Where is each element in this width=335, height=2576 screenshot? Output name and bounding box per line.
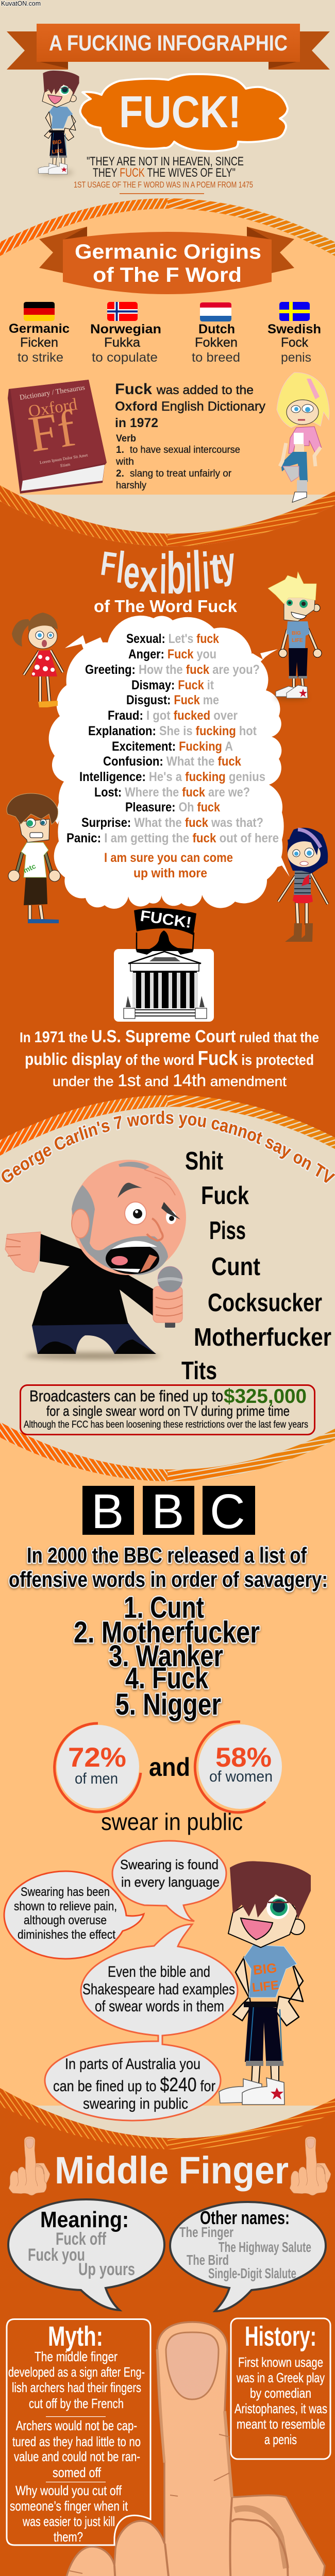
character: spiky blond boy: BIG (292, 631, 301, 636)
bubble: other names: The Bird (187, 2252, 229, 2268)
thought cloud with usage list: Explanation: She is fucking hot (88, 724, 257, 738)
panel: BBC (0, 1437, 335, 2121)
bubble: bible and Shakespeare: Even the bible and (108, 1963, 210, 1980)
ranked list: 3. Wanker (109, 1639, 223, 1673)
quote: 1ST USAGE OF THE F WORD WAS IN A POEM FROM 1475 (74, 180, 253, 190)
quote: "THEY ARE NOT IN HEAVEN, SINCE (87, 155, 244, 168)
Germanic label: to strike (18, 350, 63, 365)
title ribbon (7, 24, 330, 70)
stat: 72% of men: 72% (68, 1742, 126, 1773)
ranked list: 2. Motherfucker (74, 1616, 260, 1649)
ranked list: 4. Fuck (125, 1662, 209, 1695)
box: myth: Archers would not be cap- (16, 2418, 137, 2433)
Supreme Court text (20, 1027, 319, 1090)
heading: Flexibility: y (216, 537, 239, 587)
bubble: meaning: Up yours (78, 2260, 135, 2279)
panel: George Carlin (0, 1095, 335, 1482)
bubble: bible and Shakespeare (45, 1924, 238, 2121)
bubble: relieves pain: Swearing has been (21, 1885, 110, 1899)
list of seven words: Fuck (201, 1182, 249, 1210)
icon: Oxford dictionary: Ff (25, 399, 79, 463)
box: myth: value and could not be ran- (14, 2449, 140, 2464)
dictionary text: to have sexual intercourse (130, 445, 240, 455)
Germanic label (9, 321, 70, 365)
thought cloud with usage list: Intelligence: He's a fucking genius (79, 770, 265, 784)
thought cloud with usage list: Surprise: What the fuck was that? (81, 816, 263, 830)
heading: Flexibility: i (185, 542, 193, 604)
bubble: other names: Other names: (200, 2207, 290, 2228)
character: boy swearing (38, 71, 79, 176)
dictionary text (115, 381, 265, 491)
character: spiky blond boy: LIFE (292, 638, 303, 643)
court card (114, 907, 214, 1022)
BBC logo: C (210, 1484, 245, 1539)
Germanic label: Germanic (9, 321, 70, 336)
callout: broadcaster fines (21, 1385, 314, 1434)
box: history: by comedian (250, 2385, 311, 2401)
bubble: meaning: Fuck off (56, 2229, 106, 2249)
bubble text: Australia fine: swearing in public (83, 2095, 188, 2112)
box: myth: tured as they had little to no (12, 2434, 141, 2449)
dictionary text: 1. (116, 445, 124, 455)
dictionary text: harshly (116, 480, 146, 491)
Norwegian label: to copulate (92, 350, 158, 365)
box: myth: developed as a sign after Eng- (8, 2364, 145, 2380)
stat: 58% of women: of women (209, 1768, 273, 1785)
stat: 72% of men: of men (75, 1770, 118, 1787)
Swedish label (267, 322, 321, 365)
illustration: giant middle finger (56, 2322, 325, 2576)
Dutch label (192, 322, 240, 365)
bubble: relieves pain: although overuse (24, 1913, 107, 1927)
Dutch label: to breed (192, 350, 240, 365)
thought cloud with usage list: up with more (133, 866, 207, 880)
dictionary text: with (115, 456, 134, 467)
flag: Netherlands (200, 302, 231, 321)
flag: Norway (107, 302, 138, 321)
Swedish label: penis (281, 350, 311, 365)
list of seven words (181, 1147, 331, 1385)
thought cloud with usage list: Greeting: How the fuck are you? (85, 663, 260, 677)
Norwegian label: Fukka (104, 335, 140, 350)
character: boy swearing: LIFE (52, 148, 63, 155)
BBC logo (82, 1484, 255, 1539)
Supreme Court text: under the 1st and 14th amendment (53, 1071, 287, 1090)
bubble: every language (112, 1841, 226, 1921)
icon: Oxford dictionary (8, 380, 107, 494)
curved heading: George Carlin's 7 words you cannot say on TV (1, 1109, 335, 1184)
speech cloud: FUCK!: FUCK! (119, 87, 241, 137)
heading: Flexibility: t (208, 544, 224, 593)
list of seven words: Tits (181, 1357, 217, 1385)
BBC headline (9, 1543, 328, 1591)
court building (124, 952, 207, 1019)
panel: middle finger (0, 2056, 335, 2576)
list of seven words: Cunt (211, 1253, 260, 1281)
dictionary text: 2. (116, 468, 124, 479)
character: George Carlin (5, 1160, 186, 1360)
box: myth (7, 2319, 150, 2545)
character: smiling boy: BIG (252, 1960, 278, 1978)
thought cloud with usage list: Excitement: Fucking A (112, 739, 233, 754)
quote: THEY FUCK THE WIVES OF ELY" (93, 166, 236, 180)
protest banner: FUCK! (139, 907, 193, 931)
character: boy swearing: BIG (52, 139, 62, 146)
bubble: meaning: Meaning: (40, 2207, 129, 2232)
heading: Flexibility: b (166, 541, 186, 606)
bubble text: Australia fine (53, 2056, 215, 2112)
thought cloud with usage list: I am sure you can come (104, 851, 233, 865)
thought cloud with usage list (49, 616, 290, 909)
character: dark-haired girl (278, 828, 328, 942)
bubble: relieves pain: shown to relieve pain, (14, 1900, 117, 1913)
icon: Oxford dictionary: Lorem Ipsum Dolor Sit Amet (39, 453, 89, 465)
ranked list: 1. Cunt (124, 1591, 204, 1624)
thought cloud with usage list: Lost: Where the fuck are we? (94, 785, 250, 800)
box: myth: them? (54, 2529, 83, 2545)
heading: Flexibility: F (98, 545, 119, 584)
connector word: and: and (149, 1753, 190, 1782)
ranked list (74, 1591, 260, 1721)
heading ribbon: Germanic Origins (75, 241, 261, 263)
thought cloud with usage list: Anger: Fuck you (128, 647, 216, 662)
icon: small hand right (290, 2137, 331, 2195)
list of seven words: Shit (185, 1147, 223, 1175)
BBC logo: B (91, 1484, 124, 1539)
dictionary text: in 1972 (115, 416, 158, 430)
dictionary text: Verb (116, 433, 136, 444)
heading: Middle Finger: Middle Finger (55, 2149, 289, 2192)
thought cloud with usage list: Disgust: Fuck me (126, 693, 219, 707)
flag: Germany (24, 302, 55, 321)
Swedish label: Fock (281, 335, 308, 350)
Dutch label: Fokken (195, 335, 238, 350)
BBC logo: B (152, 1484, 184, 1539)
bubble text: Australia fine: can be fined up to $240 for (53, 2074, 215, 2096)
thought cloud with usage list: Pleasure: Oh fuck (125, 800, 220, 815)
panel: flexibility (0, 485, 335, 1156)
bubble: relieves pain: diminishes the effect (18, 1928, 115, 1942)
dictionary text: Oxford English Dictionary (115, 399, 265, 414)
character: brown-haired boy: mtc (22, 862, 37, 875)
heading: Flexibility: i (159, 544, 167, 605)
ranked list: 5. Nigger (115, 1688, 221, 1721)
bubble: other names (170, 2202, 326, 2311)
box: history: a penis (264, 2432, 297, 2447)
panel: Germanic origins (0, 198, 335, 502)
subheading: of The Word Fuck (94, 597, 238, 616)
callout: broadcaster fines: for a single swear word on TV during prime time (46, 1403, 290, 1419)
icon: Oxford dictionary: Dictionary / Thesaurus (19, 384, 86, 402)
callout: broadcaster fines: Broadcasters can be fined up to (29, 1387, 223, 1405)
protest banner (134, 907, 196, 955)
character: spiky blond boy (268, 572, 322, 700)
speech cloud: FUCK! (80, 74, 288, 151)
bubble: relieves pain (4, 1871, 144, 1959)
bubble: every language: in every language (121, 1874, 220, 1890)
character: girl in red dress (12, 613, 63, 707)
list of seven words: Piss (209, 1217, 246, 1245)
Norwegian label: Norwegian (90, 322, 161, 336)
Dutch label: Dutch (198, 322, 235, 336)
heading ribbon: of The F Word (93, 264, 242, 286)
bubble: meaning: Fuck you (28, 2245, 85, 2265)
icon: small hand left (9, 2137, 50, 2195)
box: myth: was easier to just kill (22, 2514, 115, 2529)
box: myth: lish archers had their fingers (12, 2380, 141, 2395)
bubble text: Australia fine: In parts of Australia you (65, 2056, 200, 2073)
callout: broadcaster fines: $325,000 (224, 1385, 307, 1408)
icon: Oxford dictionary: Etiam (60, 462, 71, 468)
stat: 58% of women: 58% (215, 1742, 272, 1773)
heading: Flexibility: i (200, 542, 211, 600)
thought cloud with usage list: Confusion: What the fuck (103, 754, 241, 769)
character: blonde girl (277, 372, 329, 502)
bubble: bible and Shakespeare: of swear words in them (95, 1998, 224, 2015)
heading ribbon (39, 227, 294, 294)
Swedish label: Swedish (267, 322, 321, 336)
box: myth: Myth: (48, 2321, 103, 2352)
stat: 58% of women (195, 1722, 282, 1812)
bubble: every language: Swearing is found (120, 1857, 219, 1872)
character: smiling boy: LIFE (252, 1978, 279, 1995)
box: myth: somed off (53, 2465, 102, 2480)
quote (74, 155, 253, 190)
Supreme Court text: public display of the word Fuck is protected (25, 1047, 314, 1070)
panel: intro (7, 24, 330, 194)
flag: Sweden (279, 302, 310, 321)
bubble: bible and Shakespeare: Shakespeare had examples (82, 1981, 235, 1998)
box: history (231, 2318, 330, 2459)
box: myth: someone’s finger when it (10, 2498, 128, 2514)
Norwegian label (90, 322, 161, 365)
Supreme Court text: In 1971 the U.S. Supreme Court ruled that the (20, 1027, 319, 1046)
caption: swear in public (101, 1808, 243, 1835)
dictionary text: slang to treat unfairly or (130, 468, 232, 479)
character: smiling boy (219, 1861, 311, 2105)
box: myth: The middle finger (35, 2349, 118, 2364)
title: A FUCKING INFOGRAPHIC (49, 31, 288, 56)
bubble: meaning (8, 2199, 164, 2310)
thought cloud with usage list: Sexual: Let's fuck (126, 632, 219, 646)
dictionary text: Fuck was added to the (115, 381, 254, 398)
heading: Flexibility: l (191, 539, 202, 604)
heading: Flexibility: l (114, 543, 127, 592)
box: myth: Why would you cut off (15, 2483, 122, 2498)
Germanic label: Ficken (20, 335, 58, 350)
character: brown-haired boy (7, 793, 60, 923)
bubble: other names: The Finger (179, 2224, 233, 2240)
thought cloud with usage list: Fraud: I got fucked over (108, 708, 238, 723)
icon: Oxford dictionary: Oxford (27, 395, 79, 421)
box: myth: cut off by the French (29, 2396, 124, 2411)
heading: Flexibility: x (139, 551, 159, 602)
thought cloud with usage list: Dismay: Fuck it (131, 678, 214, 692)
heading: Flexibility: e (122, 547, 142, 598)
heading: Flexibility (98, 537, 239, 606)
stat: 72% of men (55, 1723, 141, 1812)
thought cloud with usage list: Panic: I am getting the fuck out of here (66, 831, 279, 845)
